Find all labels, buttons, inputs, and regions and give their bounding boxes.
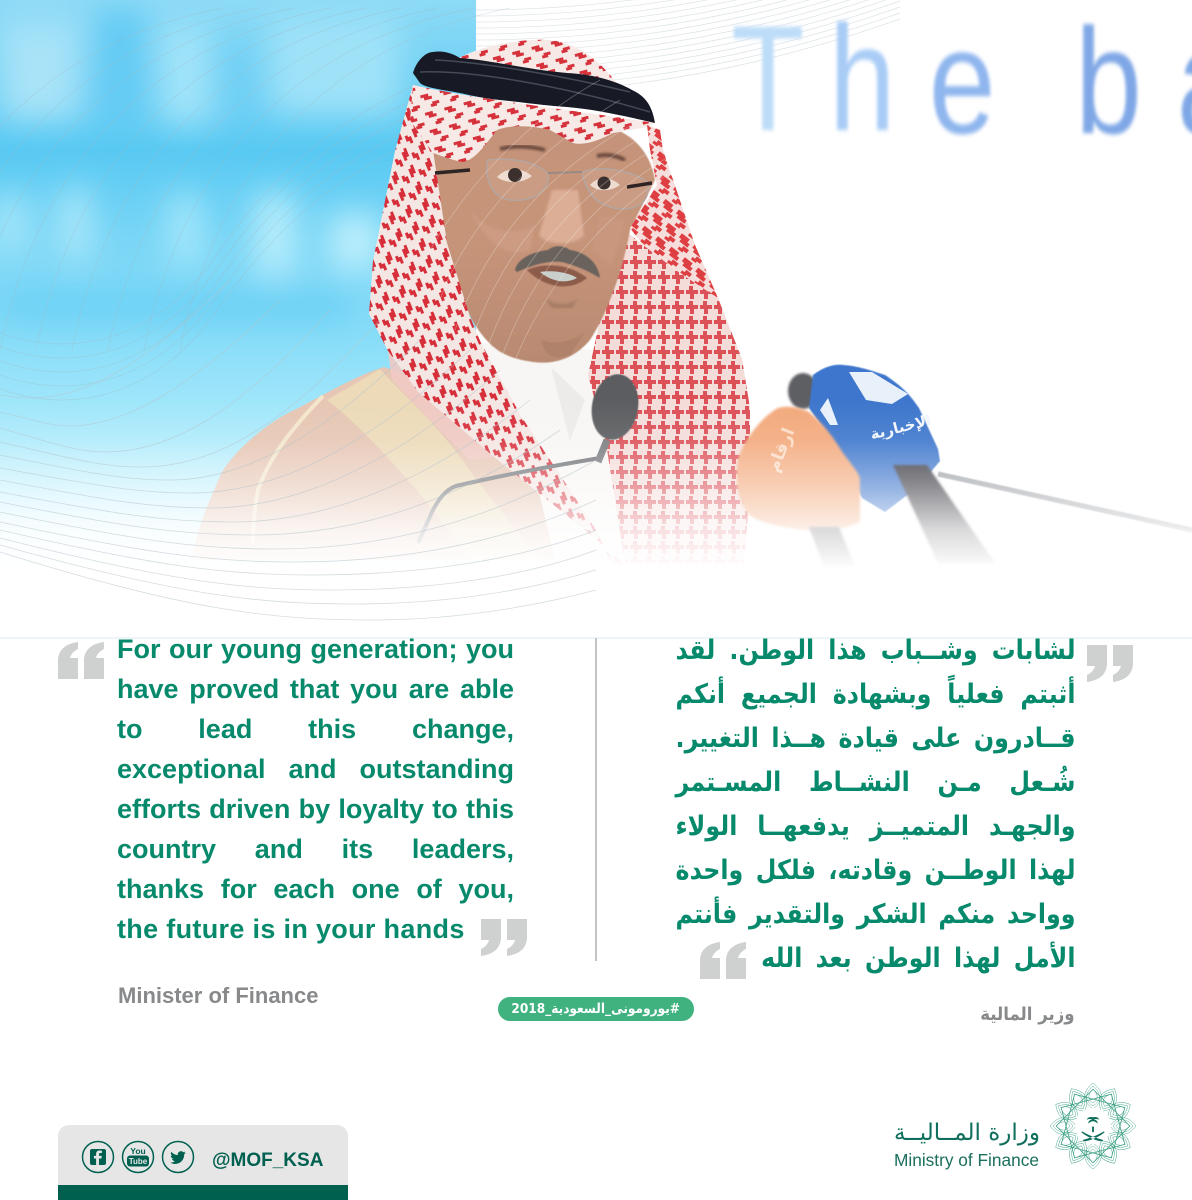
blue microphone: الإخبارية bbox=[868, 411, 933, 443]
microphone arm bbox=[418, 458, 600, 543]
icon: youtube: You bbox=[130, 1146, 146, 1156]
quote mark: Arabic closing bbox=[700, 942, 746, 979]
bisht cloak and thobe bbox=[192, 343, 630, 560]
keffiyeh forehead fold bbox=[410, 85, 655, 162]
blue microphone bbox=[788, 365, 995, 563]
quote mark: English opening bbox=[58, 642, 104, 679]
keffiyeh crown bbox=[455, 40, 622, 90]
divider between quotes bbox=[595, 638, 597, 961]
English quote text: the future is in your hands bbox=[117, 914, 465, 944]
glasses, eyes, brows, mustache, mouth bbox=[435, 146, 652, 308]
podium microphones bbox=[418, 365, 1192, 567]
Arabic quote text: لشابات وشــباب هذا الوطن. لقد bbox=[675, 635, 1075, 666]
blurred stage text bbox=[731, 0, 1192, 165]
Arabic attribution: وزير المالية bbox=[981, 1004, 1075, 1025]
blurred stage text: e bbox=[929, 0, 996, 165]
Arabic quote text: قــادرون على قيادة هــذا التغيير. bbox=[675, 723, 1075, 754]
ministry logo bbox=[894, 1083, 1136, 1170]
thin contour lines bbox=[0, 0, 900, 400]
white fade over photo bottom bbox=[0, 400, 1192, 600]
quote mark: English closing bbox=[481, 919, 527, 956]
hashtag pill: #يورومونى_السعودية_2018 bbox=[512, 1001, 680, 1017]
icon: youtube: Tube bbox=[129, 1157, 148, 1166]
face bbox=[430, 120, 655, 363]
footer green band bbox=[58, 1185, 348, 1200]
English attribution: Minister of Finance bbox=[118, 983, 318, 1008]
hashtag pill bbox=[498, 997, 694, 1021]
social icons bbox=[82, 1140, 194, 1174]
keffiyeh headscarf bbox=[369, 40, 750, 565]
small podium microphone bbox=[587, 371, 643, 443]
logo English wordmark: Ministry of Finance bbox=[894, 1150, 1039, 1170]
faint contour lines across the face bbox=[425, 80, 690, 362]
Arabic quote text: أثبتم فعلياً وبشهادة الجميع أنكم bbox=[675, 679, 1075, 710]
English quote text: thanks for each one of you, bbox=[117, 874, 514, 904]
blurred stage text: b bbox=[1075, 0, 1142, 165]
Arabic quote text: الأمل لهذا الوطن بعد الله bbox=[761, 943, 1075, 974]
logo Arabic wordmark: وزارة المــاليــة bbox=[894, 1120, 1040, 1146]
igal black headband bbox=[413, 52, 655, 123]
Arabic quote text: وواحد منكم الشكر والتقدير فأنتم bbox=[675, 899, 1075, 930]
keffiyeh right flap bbox=[630, 125, 718, 298]
Arabic quote text: والجهـد المتميــز يدفعهــا الولاء bbox=[675, 811, 1075, 842]
photo: minister speaking at podium bbox=[0, 0, 1192, 639]
English quote text: exceptional and outstanding bbox=[117, 754, 514, 784]
logo rosette emblem bbox=[1050, 1083, 1136, 1169]
icon: facebook bbox=[82, 1142, 114, 1172]
social media panel bbox=[58, 1125, 348, 1200]
English quote text: country and its leaders, bbox=[117, 834, 514, 864]
keffiyeh left drape bbox=[369, 85, 625, 565]
blurred blue backdrop bbox=[0, 0, 1192, 640]
lower contour bowl lines bbox=[0, 280, 596, 620]
pale folded scarf at shoulder bbox=[388, 351, 494, 460]
icon: twitter bbox=[162, 1142, 194, 1172]
icon: youtube bbox=[122, 1142, 154, 1172]
English quote text bbox=[117, 634, 514, 944]
English quote text: efforts driven by loyalty to this bbox=[117, 794, 514, 824]
social handle: @MOF_KSA bbox=[212, 1150, 323, 1171]
Arabic quote text: لهذا الوطــن وقادته، فلكل واحدة bbox=[675, 855, 1075, 886]
boom arm bbox=[938, 474, 1192, 530]
Arabic quote text: شُـعل مـن النشــاط المسـتمر bbox=[675, 767, 1075, 798]
orange microphone: ارقام bbox=[764, 425, 799, 475]
quote mark: Arabic opening bbox=[1087, 645, 1133, 682]
orange microphone bbox=[737, 407, 860, 567]
English quote text: have proved that you are able bbox=[117, 674, 514, 704]
keffiyeh lower right drape bbox=[588, 220, 750, 563]
English quote text: For our young generation; you bbox=[117, 634, 514, 664]
English quote text: to lead this change, bbox=[117, 714, 514, 744]
Arabic quote text bbox=[674, 635, 1075, 974]
